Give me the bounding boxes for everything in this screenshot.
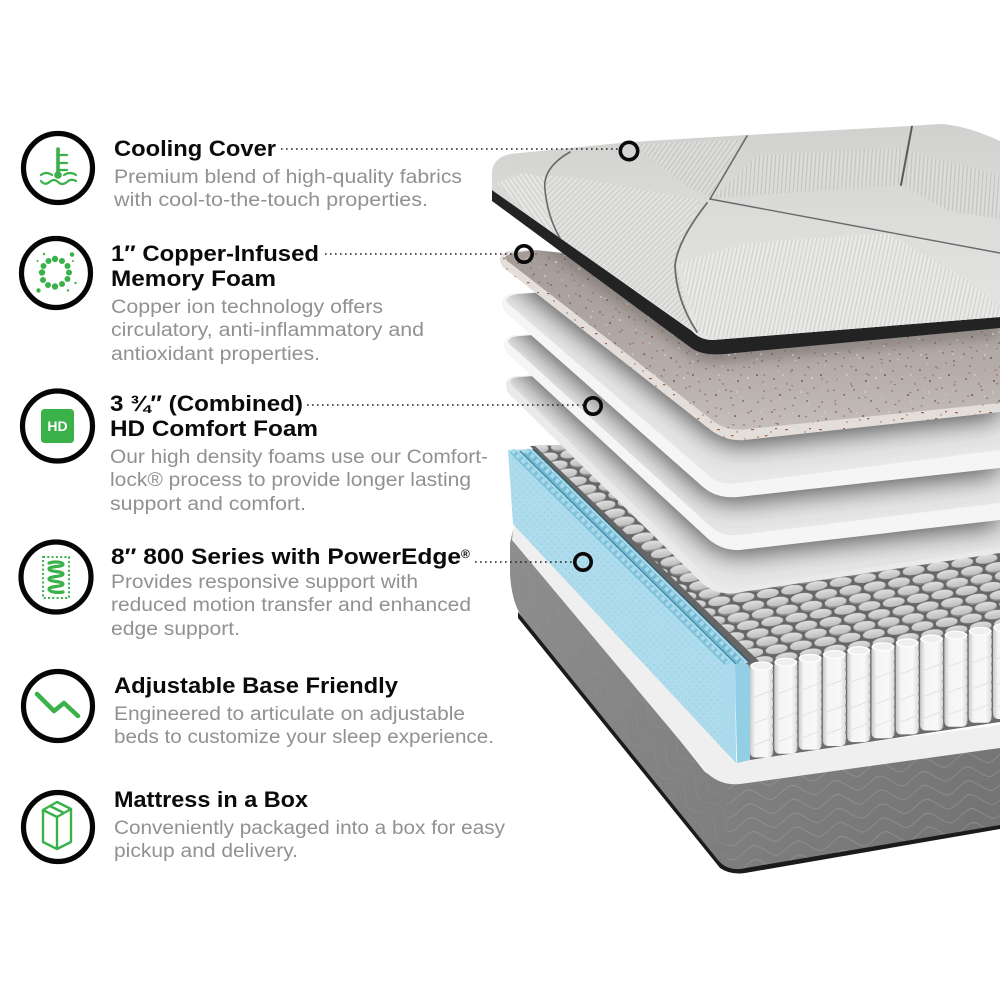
leader: PowerEdge coils: [475, 554, 591, 570]
text block: copper-infused memory foam: 1″ Copper-Infused: [111, 241, 319, 266]
icon: copper ions ring: [22, 238, 90, 308]
layer: grey quilted base: [510, 530, 1000, 873]
text block: copper-infused memory foam: Memory Foam: [111, 266, 276, 291]
text block: 800 series: ®: [461, 547, 470, 561]
icon: HD badge: [22, 391, 92, 461]
leader: HD comfort foam: [307, 398, 601, 414]
icon: HD badge: HD: [47, 418, 68, 434]
leader: copper foam: [325, 246, 532, 262]
front coil row: [750, 623, 1000, 758]
text block: cooling cover: with cool-to-the-touch properties.: [113, 190, 428, 211]
text block: HD comfort foam: Our high density foams use our Comfort-: [110, 447, 488, 468]
cover seams: [545, 126, 1000, 332]
layer: HD comfort foam 3: [506, 375, 1000, 594]
text block: 800 series: Provides responsive support with: [111, 572, 418, 593]
layer: HD comfort foam 2: [504, 334, 1000, 550]
text block: adjustable base: Adjustable Base Friendly: [114, 673, 399, 698]
front coil backing: [750, 627, 1000, 760]
icon: adjustable base zigzag: [24, 672, 92, 740]
text block: HD comfort foam: 3 ¾″ (Combined): [110, 391, 303, 416]
text block: 800 series: reduced motion transfer and enhanced: [111, 595, 471, 616]
coil tops: [530, 445, 1000, 668]
leader: cooling cover: [281, 142, 638, 160]
layer: cooling cover: [492, 124, 1000, 354]
icon: spring in dotted frame: [21, 542, 91, 612]
text block: 800 series: edge support.: [111, 619, 240, 640]
text block: HD comfort foam: [110, 391, 488, 515]
text block: copper-infused memory foam: antioxidant properties.: [111, 344, 320, 365]
text block: adjustable base: [114, 673, 494, 748]
text block: adjustable base: Engineered to articulate on adjustable: [114, 704, 465, 725]
text block: mattress in a box: Mattress in a Box: [114, 787, 309, 812]
text block: cooling cover: Cooling Cover: [114, 136, 276, 161]
text block: cooling cover: [113, 136, 462, 211]
text block: HD comfort foam: lock® process to provide longer lasting: [110, 470, 471, 491]
illustration: exploded mattress layers: [490, 124, 1000, 873]
text block: cooling cover: Premium blend of high-quality fabrics: [114, 167, 462, 188]
text block: copper-infused memory foam: circulatory, anti-inflammatory and: [111, 320, 424, 341]
text block: copper-infused memory foam: [111, 241, 424, 365]
text block: 800 series: [111, 544, 471, 640]
cover stripe zones: [545, 175, 700, 330]
text block: copper-infused memory foam: Copper ion technology offers: [111, 297, 383, 318]
text block: 800 series: 8″ 800 Series with PowerEdge: [111, 544, 461, 569]
icon: cooling thermometer: [24, 134, 92, 202]
text block: mattress in a box: pickup and delivery.: [114, 841, 298, 862]
text block: mattress in a box: Conveniently packaged into a box for easy: [114, 818, 506, 839]
text block: HD comfort foam: HD Comfort Foam: [110, 416, 318, 441]
layer: pocket coil unit: [508, 445, 1000, 763]
layer: copper-infused memory foam: [500, 250, 1000, 440]
icon: mattress box: [24, 792, 92, 862]
blue PowerEdge side panel: [508, 449, 750, 763]
text block: HD comfort foam: support and comfort.: [110, 494, 306, 515]
text block: adjustable base: beds to customize your sleep experience.: [114, 727, 494, 748]
layer: HD comfort foam 1: [502, 292, 1000, 498]
text block: mattress in a box: [114, 787, 506, 862]
layer: white plate under coils: [512, 522, 1000, 784]
